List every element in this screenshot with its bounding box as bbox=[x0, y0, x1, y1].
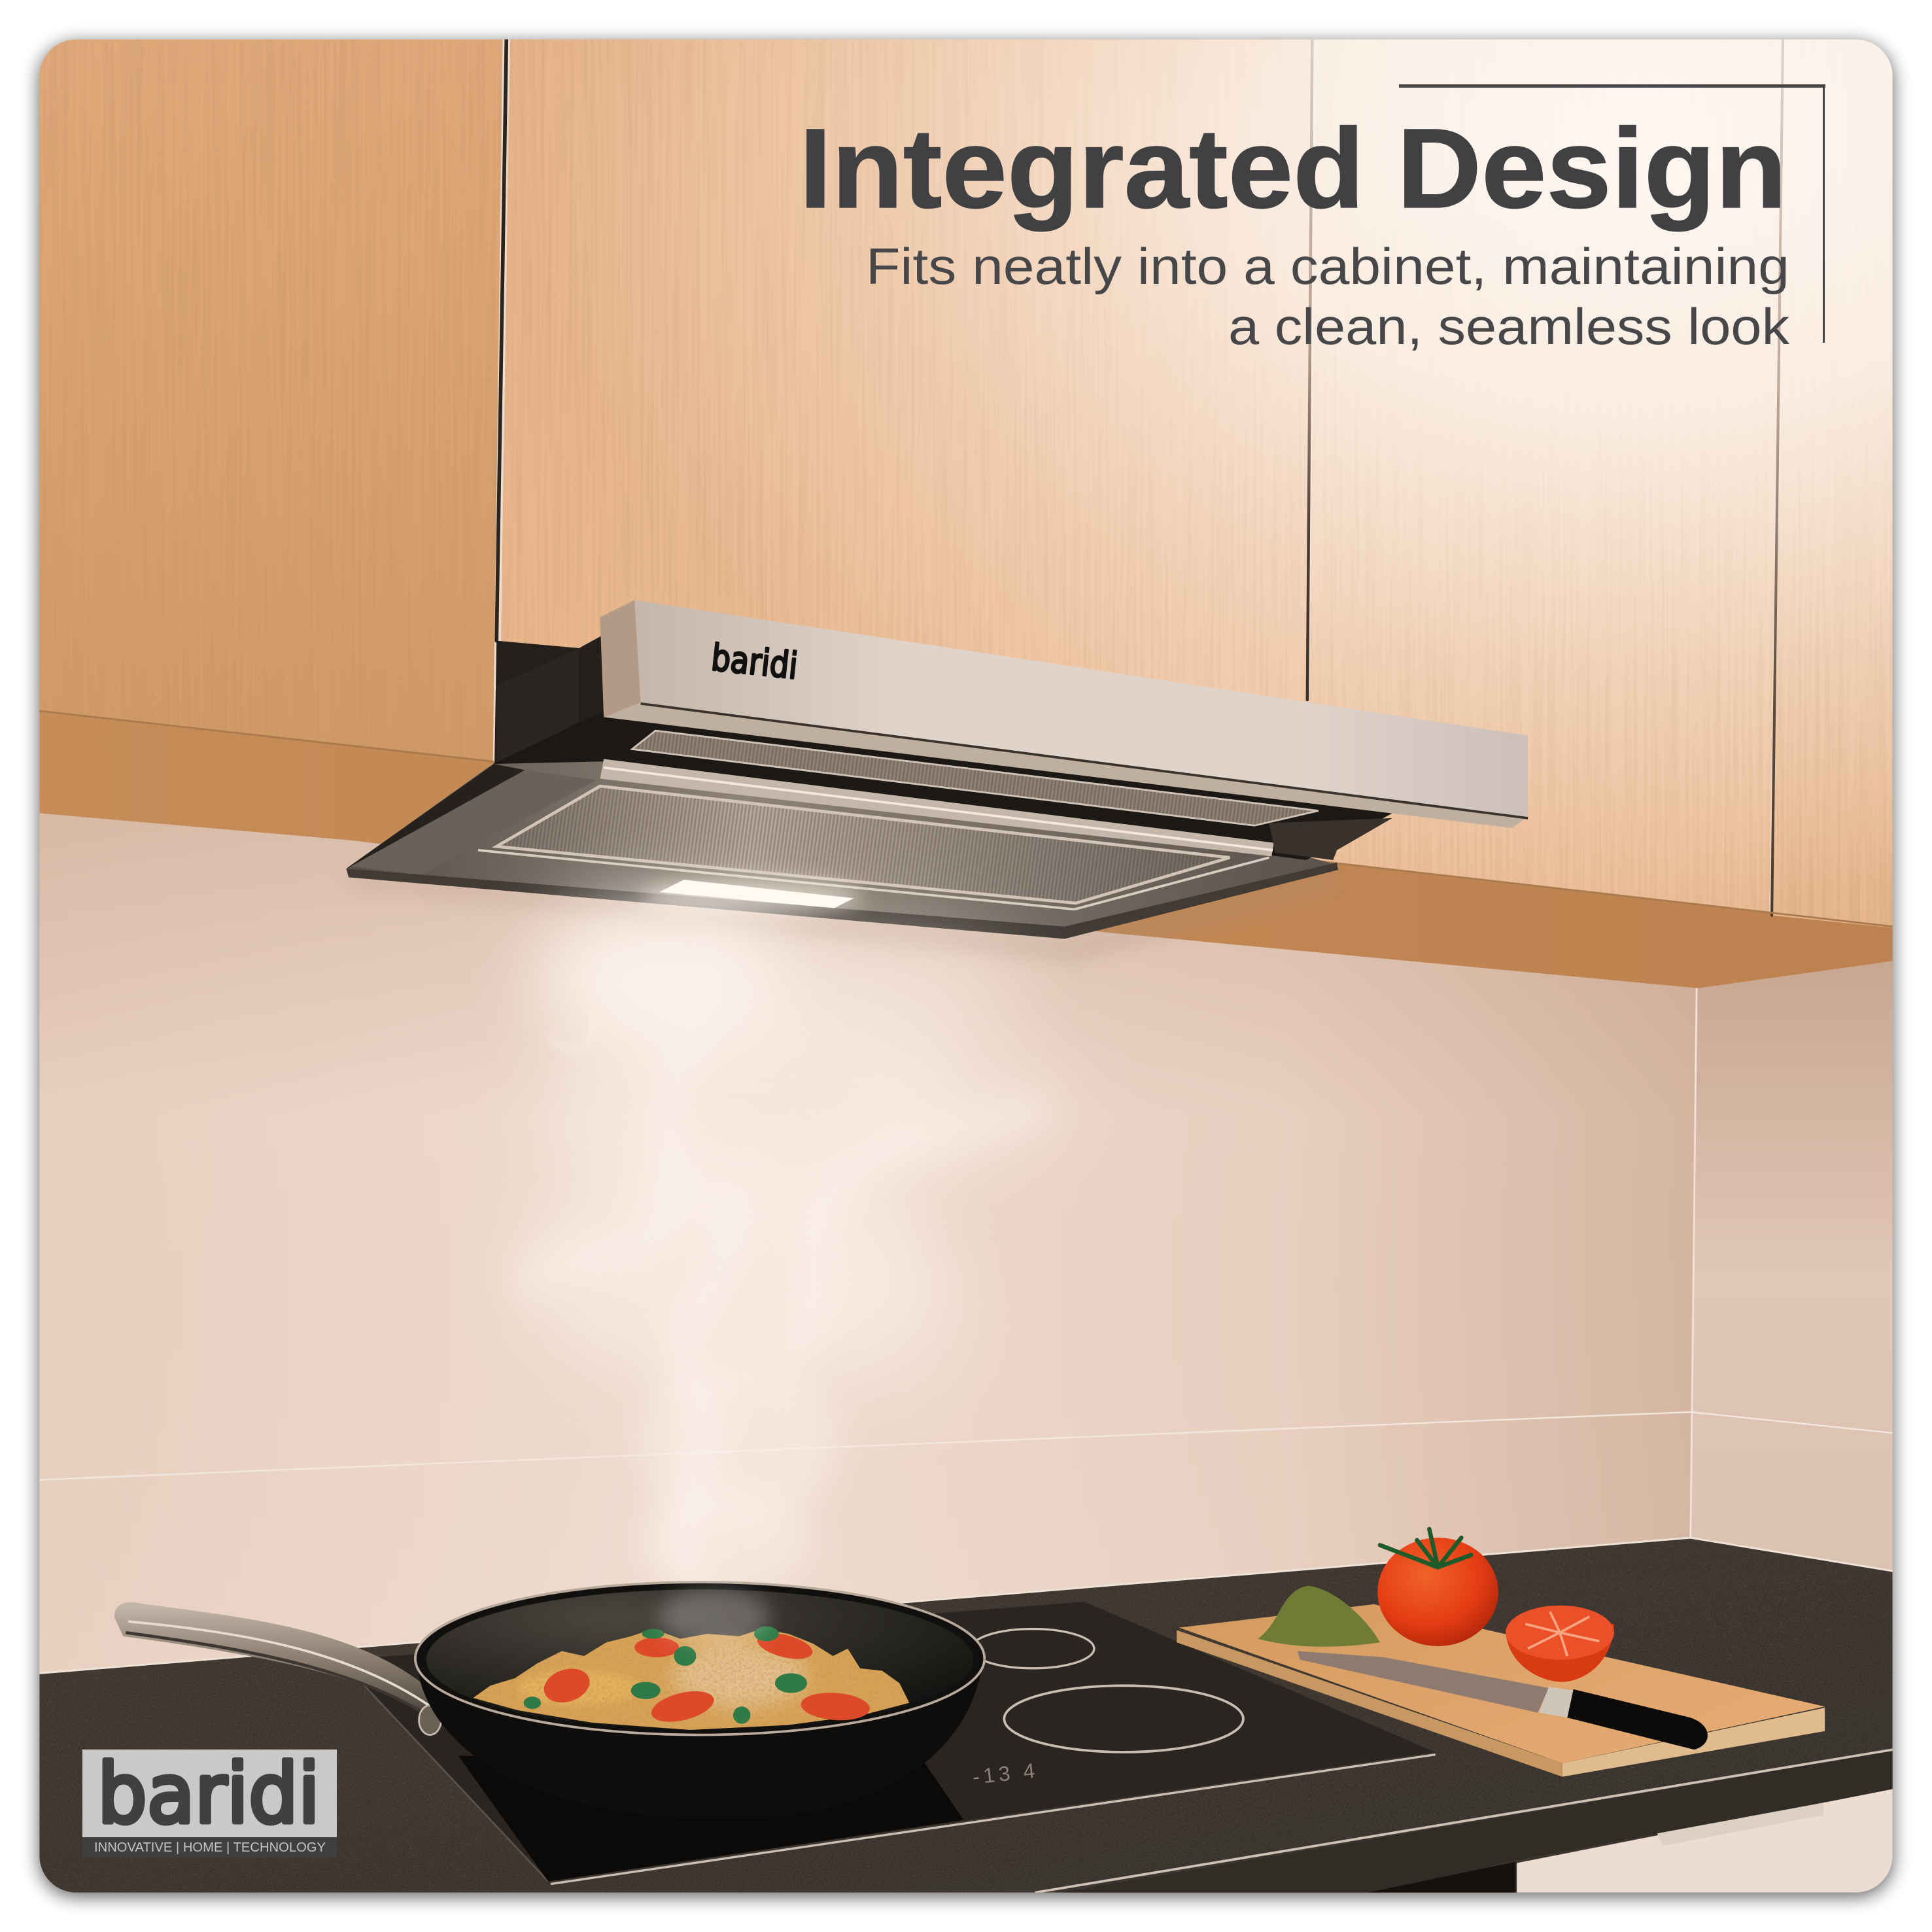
pan handle bbox=[114, 1602, 441, 1735]
headline group bbox=[799, 84, 1825, 355]
slider bar bbox=[600, 759, 1274, 856]
induction cooktop bbox=[357, 1602, 1436, 1884]
frying pan bbox=[114, 1582, 984, 1819]
cooktop touch controls: -13 4 bbox=[971, 1759, 1040, 1789]
whole tomato bbox=[1377, 1529, 1498, 1646]
hood right bracket bbox=[1269, 818, 1392, 860]
title: Integrated Design bbox=[799, 105, 1787, 232]
herb leaf bbox=[1258, 1586, 1380, 1647]
cabinet door: far right bbox=[1773, 39, 1893, 928]
pan steam bbox=[659, 1587, 770, 1646]
cabinet door: left bbox=[39, 39, 503, 761]
right side wall bbox=[1691, 961, 1893, 1589]
fascia side return bbox=[600, 600, 641, 717]
subtitle: Fits neatly into a cabinet, maintaining bbox=[866, 237, 1789, 295]
counter back highlight bbox=[39, 1538, 1893, 1673]
back wall bbox=[39, 690, 1697, 1725]
shadow under hood bbox=[346, 870, 1337, 961]
door seams bbox=[39, 39, 1893, 927]
cabinet door: right bbox=[1309, 39, 1782, 913]
knife bbox=[1298, 1651, 1708, 1750]
food mound bbox=[468, 1624, 914, 1735]
subtitle bbox=[866, 237, 1790, 355]
steam plume bbox=[517, 899, 1072, 1589]
hood frame bbox=[346, 754, 1337, 938]
scene lower half bbox=[39, 899, 1893, 1897]
pan rim bbox=[415, 1582, 984, 1735]
lower cabinet door bbox=[1517, 1789, 1893, 1893]
brand logo badge bbox=[82, 1746, 337, 1857]
logo wordmark: baridi bbox=[97, 1746, 320, 1842]
hood inner shadow bbox=[493, 712, 1392, 860]
pan body bbox=[417, 1657, 983, 1819]
lower frame front strip bbox=[478, 850, 1269, 909]
upper mesh filter bbox=[632, 731, 1319, 825]
subtitle: a clean, seamless look bbox=[1228, 298, 1790, 355]
cooktop front highlight bbox=[551, 1755, 1436, 1884]
cabinet underside bbox=[39, 711, 1893, 988]
counter front face bbox=[1060, 1751, 1893, 1893]
countertop bbox=[39, 1538, 1893, 1893]
green pieces bbox=[524, 1627, 807, 1724]
dark gap under counter bbox=[1368, 1862, 1515, 1893]
cutting board bbox=[1177, 1529, 1825, 1777]
countertop texture bbox=[39, 1528, 1893, 1897]
hood logo: baridi bbox=[710, 636, 800, 688]
lower mesh filter bbox=[496, 786, 1230, 903]
stainless fascia bbox=[634, 600, 1528, 817]
fascia underside lip bbox=[604, 702, 1528, 828]
logo tagline: INNOVATIVE | HOME | TECHNOLOGY bbox=[94, 1840, 326, 1855]
wood grain bbox=[39, 39, 1893, 933]
burner ring: back bbox=[971, 1629, 1094, 1668]
steam wisps bbox=[530, 1047, 1035, 1577]
frame left strip bbox=[351, 770, 596, 875]
halved tomato bbox=[1506, 1606, 1614, 1682]
pan interior bbox=[426, 1589, 973, 1730]
corner frame bbox=[1399, 84, 1825, 343]
highlight over upper right cabinets bbox=[530, 0, 1932, 912]
range hood bbox=[346, 600, 1528, 939]
door handle bbox=[1657, 1803, 1823, 1846]
hood dark side bracket bbox=[494, 634, 604, 789]
pan shadow on cooktop bbox=[458, 1756, 963, 1882]
cabinet door: middle bbox=[499, 39, 1313, 850]
lamp glow bbox=[641, 880, 863, 914]
hood lamp bbox=[659, 880, 854, 908]
tomato pieces bbox=[540, 1629, 871, 1727]
wall corner and backsplash lines bbox=[39, 988, 1893, 1540]
burner ring: front bbox=[1004, 1685, 1243, 1752]
